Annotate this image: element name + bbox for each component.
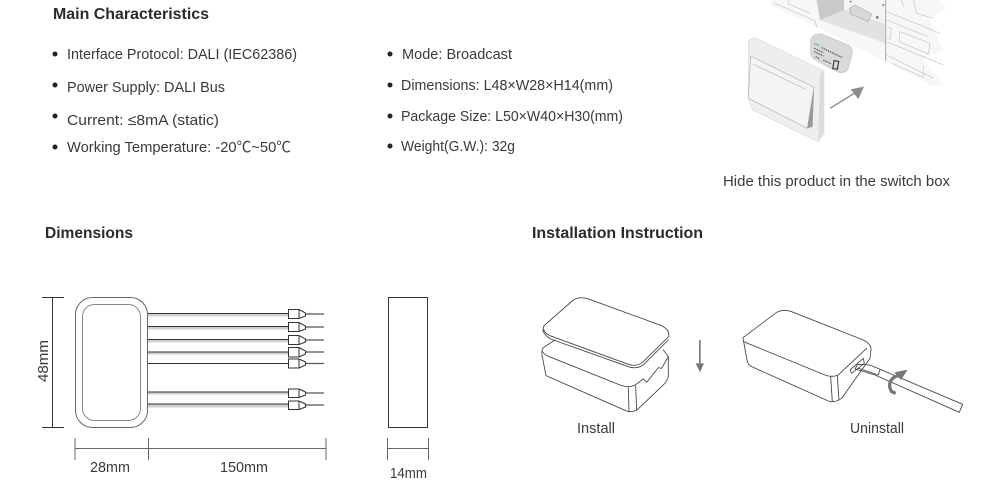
bullet list: left column: Current: ≤8mA (static) [67, 112, 219, 129]
down arrow [696, 340, 704, 372]
bullet list: left column: Working Temperature: -20℃~50℃ [67, 139, 291, 156]
dimension: 28mm and 150mm [75, 438, 326, 476]
heading: dimensions: Dimensions [45, 225, 133, 242]
dimension: 48mm: 48mm [35, 340, 52, 382]
bullet list: right column: Package Size: L50×W40×H30(mm) [401, 108, 623, 125]
caption: uninstall: Uninstall [850, 420, 904, 437]
module [811, 34, 852, 73]
lid [543, 298, 669, 365]
illustration: product hidden in switch box [748, 0, 947, 142]
closed box [743, 310, 871, 402]
switch plate [748, 38, 824, 142]
module body [76, 298, 148, 428]
bullet list: right column: Weight(G.W.): 32g [401, 138, 515, 155]
panel: main characteristics [52, 6, 623, 156]
caption: install: Install [577, 420, 615, 437]
box base [542, 340, 668, 412]
drawing: module front dimensions [35, 298, 326, 476]
screwdriver [855, 364, 963, 412]
bullet list: right column: Dimensions: L48×W28×H14(mm) [401, 77, 613, 94]
rotate arrow [890, 370, 908, 393]
bullet list: right column: Mode: Broadcast [402, 46, 513, 63]
bullet list: left column: Power Supply: DALI Bus [67, 79, 225, 96]
bullet list: right column [388, 46, 623, 155]
illustration: install [542, 298, 704, 412]
bullet list: left column: Interface Protocol: DALI (IEC62386) [67, 46, 297, 63]
wires [148, 314, 324, 406]
illustration: uninstall [743, 310, 963, 412]
dimension: 28mm and 150mm: 150mm [220, 459, 268, 476]
arrow [830, 87, 864, 108]
dimension: 14mm: 14mm [390, 465, 427, 482]
heading: main characteristics: Main Characteristics [53, 6, 209, 23]
wall with bricks [770, 0, 947, 86]
heading: installation instruction: Installation Instruction [532, 225, 703, 242]
connectors [288, 310, 306, 410]
drawing: module side dimensions [388, 298, 428, 482]
caption: switch box: Hide this product in the switch box [723, 173, 950, 190]
dimension: 48mm [35, 298, 64, 428]
bullet list: left column [52, 46, 297, 156]
dimension: 14mm [388, 438, 428, 482]
dimension: 28mm and 150mm: 28mm [90, 459, 130, 476]
